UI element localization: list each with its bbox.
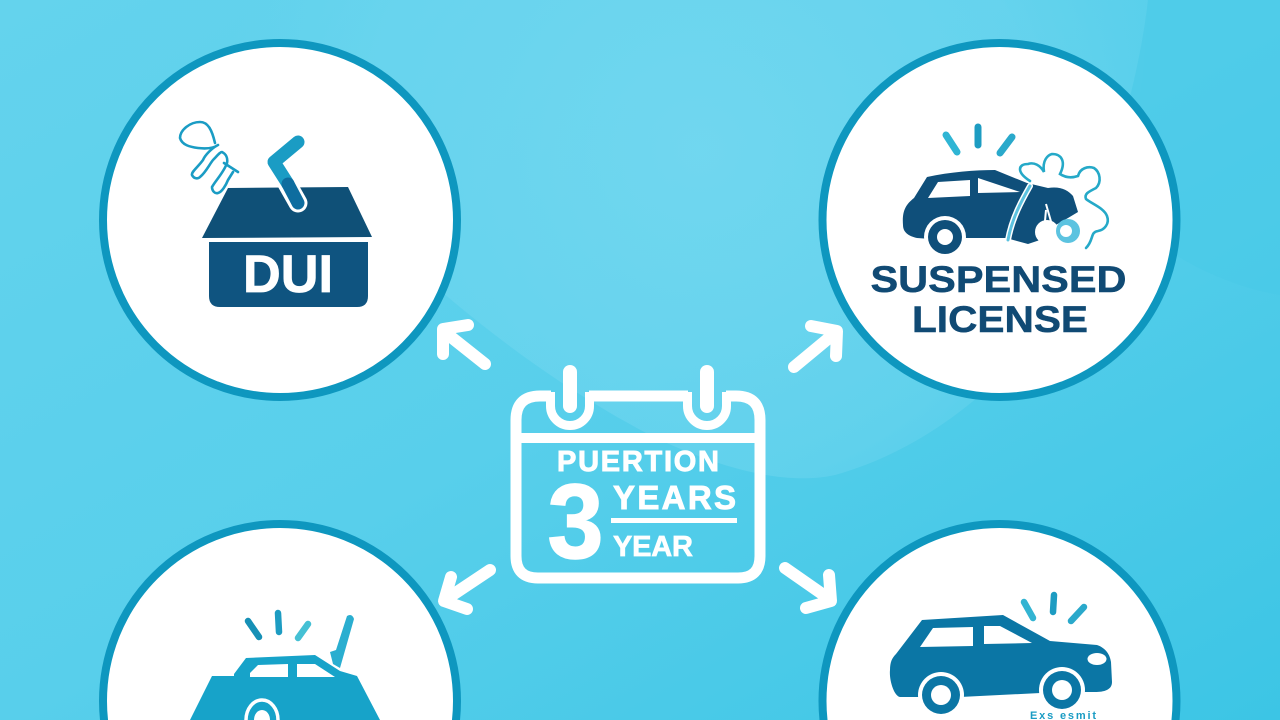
text: years: YEARS: [613, 479, 736, 516]
icon: impact dashes: [946, 127, 1012, 153]
text: year: YEAR: [613, 531, 693, 563]
divider line: [611, 518, 737, 523]
icon: impact dashes: [1024, 595, 1084, 621]
icon: antenna: [330, 615, 354, 668]
icon: alert dashes: [248, 613, 308, 638]
icon: calendar frame: [516, 396, 760, 578]
circle: suspended license: [822, 43, 1176, 397]
arrow: bottom left: [444, 570, 490, 609]
icon: car: [890, 615, 1112, 718]
circle: bottom right: [822, 524, 1176, 720]
circle: bottom left: [103, 524, 457, 720]
icon: calendar divider: [516, 433, 760, 443]
label: license: LICENSE: [912, 299, 1088, 340]
panel: DUI: [103, 43, 457, 397]
icon: crashed car: [903, 170, 1080, 258]
icon: house box: [202, 187, 372, 307]
text: puertion: PUERTION: [557, 446, 719, 478]
arrow: top left: [443, 325, 485, 364]
icon: left ring: [550, 372, 590, 426]
circle: DUI: [103, 43, 457, 397]
text: 3: 3: [548, 463, 604, 581]
icon: cloud outline: [1020, 154, 1108, 248]
icon: car front: [190, 655, 380, 720]
arrow: top right: [794, 326, 837, 367]
panel: bottom left car: [103, 524, 457, 720]
panel: suspended license: [822, 43, 1176, 397]
arrow: bottom right: [785, 568, 831, 608]
label: suspended: SUSPENSED: [870, 259, 1126, 300]
icon: boomerang: [274, 142, 298, 203]
panel: bottom right car: [822, 524, 1176, 720]
icon: right ring: [688, 372, 727, 426]
label: DUI: DUI: [243, 245, 333, 304]
panel: calendar: [516, 372, 760, 581]
icon: squiggle: [180, 122, 238, 193]
